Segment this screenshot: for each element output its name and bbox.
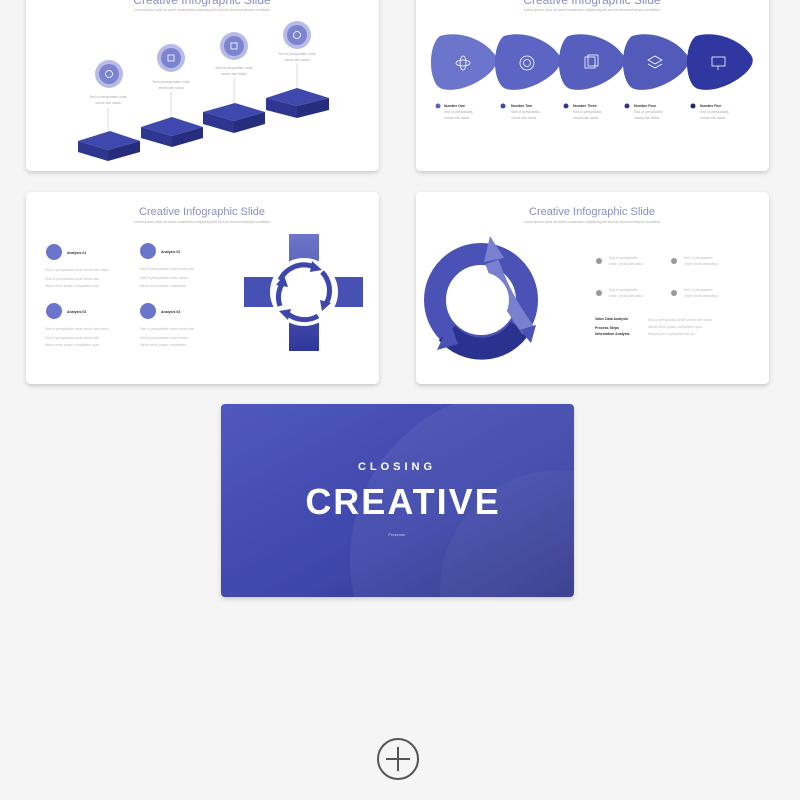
step labels: omnis iste natus [221,72,247,76]
feature items: Process Steps [595,326,619,330]
petal labels: Sed ut perspiciatis [700,110,729,114]
analysis items: Nemo enim ipsam voluptatem [140,284,186,288]
panel: petals slide: Lorem ipsum dolor sit amet consectetur adipiscing elit sed do eiusmod tempor incididunt [524,8,660,12]
feature items: Sed ut perspiciatis [684,256,713,260]
feature items: Information Analysis [595,332,630,336]
step labels [89,52,316,105]
step labels: Sed ut perspiciatis unde [89,95,127,99]
feature items: unde omnis iste natus [684,294,718,298]
petal labels: Sed ut perspiciatis [573,110,602,114]
petal labels: Sed ut perspiciatis [444,110,473,114]
analysis items: Sed ut perspiciatis unde omnis iste natus [45,268,109,272]
petal labels: Number One [444,104,465,108]
analysis items: Analysis 01 [67,251,86,255]
petal labels: Number Two [511,104,532,108]
connector lines [108,63,297,134]
petal icons [456,55,725,70]
feature items: Value Data Analysis [595,317,628,321]
analysis items: Analysis 04 [161,310,180,314]
subtitle: Lorem ipsum dolor sit amet consectetur adipiscing elit sed do eiusmod tempor incididunt [134,8,270,12]
analysis items: Nemo enim ipsam voluptatem quia [45,343,99,347]
petal labels: Number Four [634,104,657,108]
feature items: Sed ut perspiciatis [609,256,638,260]
petal labels: omnis iste natus [573,116,599,120]
step labels: omnis iste natus [284,58,310,62]
panel: circular arrows slide: Lorem ipsum dolor sit amet consectetur adipiscing elit sed do eiusmod tempor incididunt [524,220,660,224]
petal labels: omnis iste natus [634,116,660,120]
analysis items [45,243,194,347]
feature items: unde omnis iste natus [609,262,643,266]
step labels: omnis iste natus [158,86,184,90]
heading: slide 4 title: Creative Infographic Slide [529,206,655,218]
petal labels: omnis iste natus [444,116,470,120]
step labels: Sed ut perspiciatis unde [215,66,253,70]
panel: closing slide [221,390,690,730]
feature items: unde omnis iste natus [684,262,718,266]
analysis items: Analysis 03 [67,310,86,314]
petal shapes [431,34,753,90]
feature items: Sed ut perspiciatis [684,288,713,292]
panel: cross slide: Lorem ipsum dolor sit amet consectetur adipiscing elit sed do eiusmod tempor incididunt [134,220,270,224]
step labels: omnis iste natus [95,101,121,105]
analysis items: Sed ut perspiciatis unde omnis [140,336,188,340]
analysis items: Nemo enim ipsam voluptatem quia [45,284,99,288]
analysis items: Nemo enim ipsam voluptatem [140,343,186,347]
feature items: Sed ut perspiciatis unde omnis iste natus [648,318,712,322]
analysis items: Sed ut perspiciatis unde omnis [140,276,188,280]
step icons [95,21,311,88]
petal labels: omnis iste natus [511,116,537,120]
presenter: Presenter [388,532,406,537]
feature items: Sed ut perspiciatis [609,288,638,292]
petal labels: Sed ut perspiciatis [634,110,663,114]
3D steps [78,88,329,161]
analysis items: Sed ut perspiciatis unde omnis iste [140,267,194,271]
closing title: CREATIVE [305,481,501,522]
heading: slide 3 title: Creative Infographic Slide [139,206,265,218]
analysis items: Sed ut perspiciatis unde omnis iste natus [45,327,109,331]
feature items [595,256,718,336]
panel: cross slide [26,192,379,384]
step labels: Sed ut perspiciatis unde [152,80,190,84]
analysis items: Sed ut perspiciatis unde omnis iste [140,327,194,331]
petal labels: Number Five [700,104,721,108]
petal labels [436,104,729,120]
analysis items: Sed ut perspiciatis unde omnis iste [45,277,99,281]
feature items: Nemo enim ipsam voluptatem quia [648,325,702,329]
feature items: unde omnis iste natus [609,294,643,298]
ring diagram [435,236,536,350]
panel: stair steps slide [26,0,379,171]
petal labels: omnis iste natus [700,116,726,120]
petal labels: Sed ut perspiciatis [511,110,540,114]
step labels: Sed ut perspiciatis unde [278,52,316,56]
analysis items: Analysis 02 [161,250,180,254]
feature items: Neque porro quisquam est qui [648,332,695,336]
petal labels: Number Three [573,104,597,108]
panel: circular arrows slide [416,192,769,384]
analysis items: Sed ut perspiciatis unde omnis iste [45,336,99,340]
icon: add slide plus [378,739,418,779]
panel: petals slide [416,0,769,171]
closing label: CLOSING [358,461,436,473]
cross with cycle arrows [244,234,363,351]
